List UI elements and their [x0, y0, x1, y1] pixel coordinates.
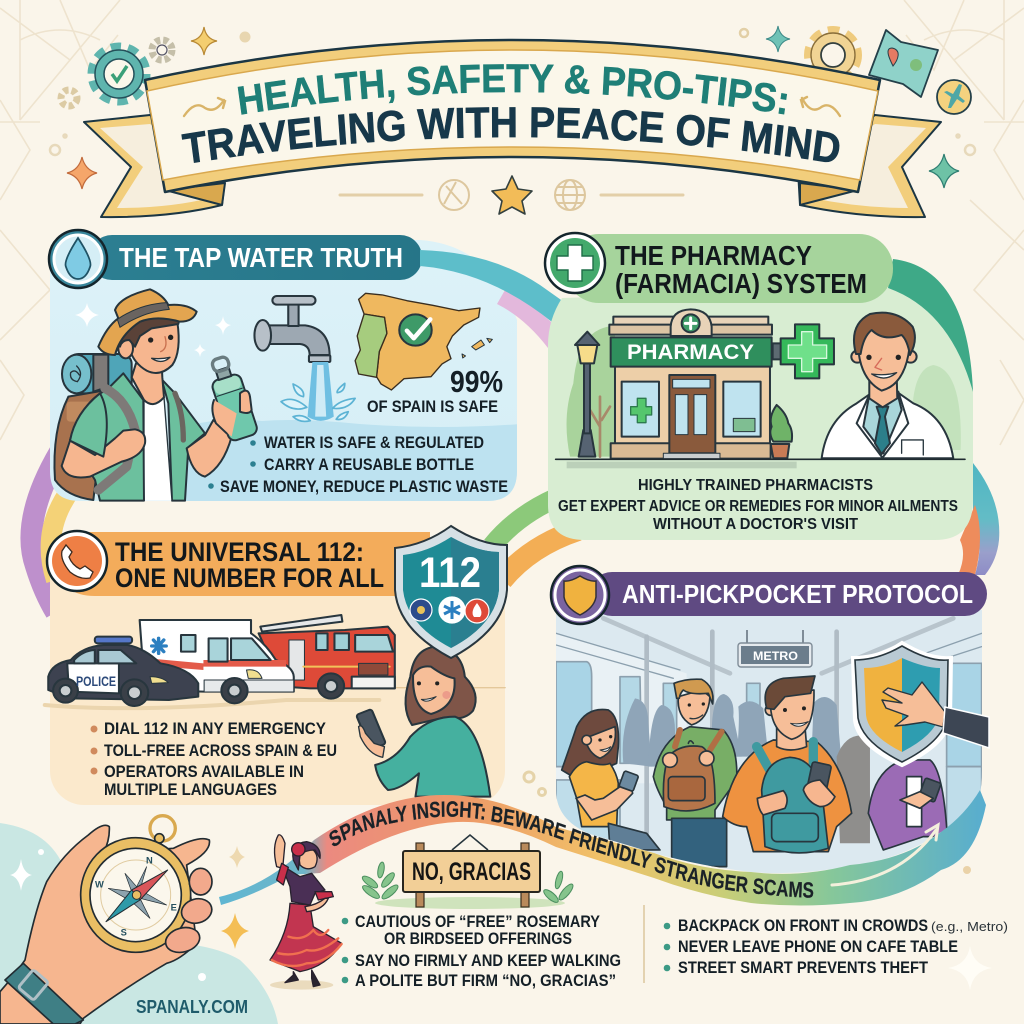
person with green sweater	[653, 679, 737, 867]
list: street scams: SAY NO FIRMLY AND KEEP WALKING	[355, 951, 621, 970]
description	[558, 477, 958, 533]
icon: tap	[254, 296, 330, 362]
header pill	[90, 235, 422, 280]
icon: green sparkle	[929, 154, 959, 188]
list: street scams: CAUTIOUS OF “FREE” ROSEMARY	[355, 912, 601, 931]
heading	[615, 240, 867, 299]
water stream	[308, 362, 334, 421]
ribbon shape	[219, 790, 986, 906]
bullet list: TOLL-FREE ACROSS SPAIN & EU	[104, 741, 337, 760]
panel background	[548, 288, 973, 540]
heading: THE UNIVERSAL 112:	[115, 537, 364, 567]
icon: orange sparkle	[67, 157, 97, 189]
banner inner panel	[147, 50, 878, 180]
illustration group	[254, 293, 492, 421]
header pill	[565, 234, 893, 303]
ground line	[556, 457, 965, 462]
ribbon text: SPANALY INSIGHT: BEWARE FRIENDLY STRANGER SCAMS	[329, 801, 814, 898]
neon cross sign	[773, 324, 834, 378]
metro sign: METRO	[753, 651, 798, 663]
blob background bottom left	[0, 823, 278, 1024]
fingers	[189, 868, 212, 895]
crowd silhouettes	[623, 694, 870, 843]
icon: hand with compass	[0, 816, 215, 1024]
brand: SPANALY.COM	[136, 997, 248, 1017]
person in purple jacket	[868, 760, 947, 850]
title line 1: HEALTH, SAFETY & PRO-TIPS:	[238, 64, 788, 115]
flamenco dancer	[270, 835, 342, 990]
description: HIGHLY TRAINED PHARMACISTS	[638, 477, 873, 494]
list: street scams	[342, 912, 621, 990]
icon: shield	[551, 566, 609, 624]
list: pickpocket: BACKPACK ON FRONT IN CROWDS	[678, 916, 928, 935]
ambulance	[140, 620, 294, 703]
stat: 99%: 99%	[450, 364, 503, 399]
bullet list: MULTIPLE LANGUAGES	[104, 780, 277, 799]
list: street scams: A POLITE BUT FIRM “NO, GRACIAS”	[355, 971, 616, 990]
backpacker illustration	[54, 289, 259, 501]
description: WITHOUT A DOCTOR'S VISIT	[653, 516, 858, 533]
ribbon: purple and yellow connector left	[31, 452, 72, 612]
train interior	[556, 618, 982, 850]
bullet list	[220, 434, 508, 496]
icon: teal sparkle	[766, 26, 790, 52]
icon: water drop	[49, 230, 107, 288]
sign text: NO, GRACIAS	[412, 858, 531, 886]
splash	[281, 383, 355, 421]
trees	[567, 326, 961, 457]
ribbon arrow	[832, 825, 938, 885]
heading	[115, 537, 384, 593]
panel: tap water	[49, 230, 520, 505]
sleeve	[943, 707, 989, 748]
pharmacist	[822, 313, 953, 458]
icon: hand with compass: W	[95, 879, 104, 889]
police car	[48, 637, 198, 706]
building	[609, 309, 772, 459]
description: GET EXPERT ADVICE OR REMEDIES FOR MINOR AILMENTS	[558, 498, 958, 515]
heading: THE TAP WATER TRUTH	[119, 242, 403, 273]
heading: ANTI-PICKPOCKET PROTOCOL	[622, 579, 973, 609]
compass	[150, 816, 175, 841]
panel background	[50, 540, 505, 805]
list: pickpocket	[664, 916, 1008, 977]
watch strap	[5, 963, 83, 1024]
ribbon: teal, orange and violet arc right	[958, 463, 999, 575]
sparkles near compass	[10, 846, 992, 990]
bullet list: OPERATORS AVAILABLE IN	[104, 762, 304, 781]
reaching hand	[882, 682, 945, 727]
lamp post	[575, 332, 599, 457]
icon: teal gear with check	[92, 47, 146, 101]
title banner	[83, 38, 942, 218]
panel: anti-pickpocket	[551, 566, 989, 880]
ribbon: green and orange connector centre	[492, 498, 578, 580]
ground	[45, 700, 379, 708]
police label: POLICE	[76, 674, 116, 689]
icon: big shield with hand	[853, 643, 989, 765]
plant	[770, 405, 792, 458]
shop and pharmacist illustration	[556, 309, 965, 468]
bullets	[208, 440, 256, 489]
small rings	[524, 772, 546, 796]
list: street scams: OR BIRDSEED OFFERINGS	[384, 929, 572, 948]
header pill	[590, 572, 987, 616]
panel background	[50, 240, 517, 501]
metro scene	[556, 610, 982, 880]
banner left tail	[84, 115, 226, 217]
icon: hand with compass: S	[121, 927, 127, 937]
bullet list: WATER IS SAFE & REGULATED	[264, 434, 484, 452]
small rings and dots	[50, 134, 975, 155]
bullet list: CARRY A REUSABLE BOTTLE	[264, 456, 474, 474]
sparkles	[75, 303, 231, 357]
bullet list: SAVE MONEY, REDUCE PLASTIC WASTE	[220, 478, 508, 496]
bullet list: DIAL 112 IN ANY EMERGENCY	[104, 719, 327, 738]
insight ribbon	[219, 790, 986, 906]
sign: no, gracias	[375, 835, 565, 909]
dot	[240, 32, 250, 42]
stat caption: OF SPAIN IS SAFE	[367, 397, 498, 416]
banner right tail	[798, 115, 941, 217]
icon: phone	[47, 531, 107, 591]
icon: star with globes divider	[340, 176, 683, 214]
banner band	[145, 40, 880, 192]
icon: plane badge	[937, 80, 971, 114]
shield badges	[410, 597, 489, 623]
panel: universal 112	[45, 526, 507, 805]
bullet list	[104, 719, 337, 799]
water bottle	[204, 354, 259, 442]
map of Spain	[355, 293, 492, 390]
icon: plants	[361, 862, 575, 904]
icon: gold sparkle	[191, 27, 217, 55]
icon: small grey gear	[152, 40, 172, 60]
title line 2: TRAVELING WITH PEACE OF MIND	[181, 107, 840, 163]
list: pickpocket: NEVER LEAVE PHONE ON CAFE TABLE	[678, 937, 958, 956]
vehicles and woman illustration	[45, 615, 505, 797]
list: pickpocket: STREET SMART PREVENTS THEFT	[678, 958, 929, 977]
ribbon: teal connector top middle	[420, 250, 564, 322]
heading: THE PHARMACY	[615, 240, 812, 271]
icon: green cross	[545, 233, 605, 293]
panel: pharmacy	[545, 233, 973, 540]
list: pickpocket: (e.g., Metro)	[931, 919, 1008, 934]
squiggles	[184, 97, 840, 116]
bullets	[90, 726, 98, 774]
shield number: 112	[419, 549, 481, 597]
icon: hand with compass: N	[146, 855, 153, 865]
sign text: PHARMACY	[627, 340, 754, 364]
hand	[0, 825, 210, 1024]
icon: hand with compass: E	[171, 903, 177, 913]
woman	[356, 647, 490, 797]
person with yellow top	[562, 710, 660, 850]
shield 112	[395, 526, 507, 658]
heading: (FARMACIA) SYSTEM	[615, 268, 867, 299]
fire truck	[259, 615, 395, 699]
decorative corner web patterns	[0, 0, 1024, 445]
header pill	[60, 532, 430, 596]
ribbon: lilac connector top middle	[497, 290, 562, 348]
icon: gold gear	[809, 31, 857, 79]
heading: ONE NUMBER FOR ALL	[115, 563, 384, 593]
ring	[740, 29, 748, 37]
ribbon: green arc right of header	[888, 259, 973, 392]
icon: tan gear	[61, 90, 77, 106]
water wave	[180, 420, 520, 505]
person with orange sweater and front backpack	[723, 676, 852, 853]
metro sign	[738, 630, 812, 667]
icon: map with pin	[869, 30, 938, 97]
